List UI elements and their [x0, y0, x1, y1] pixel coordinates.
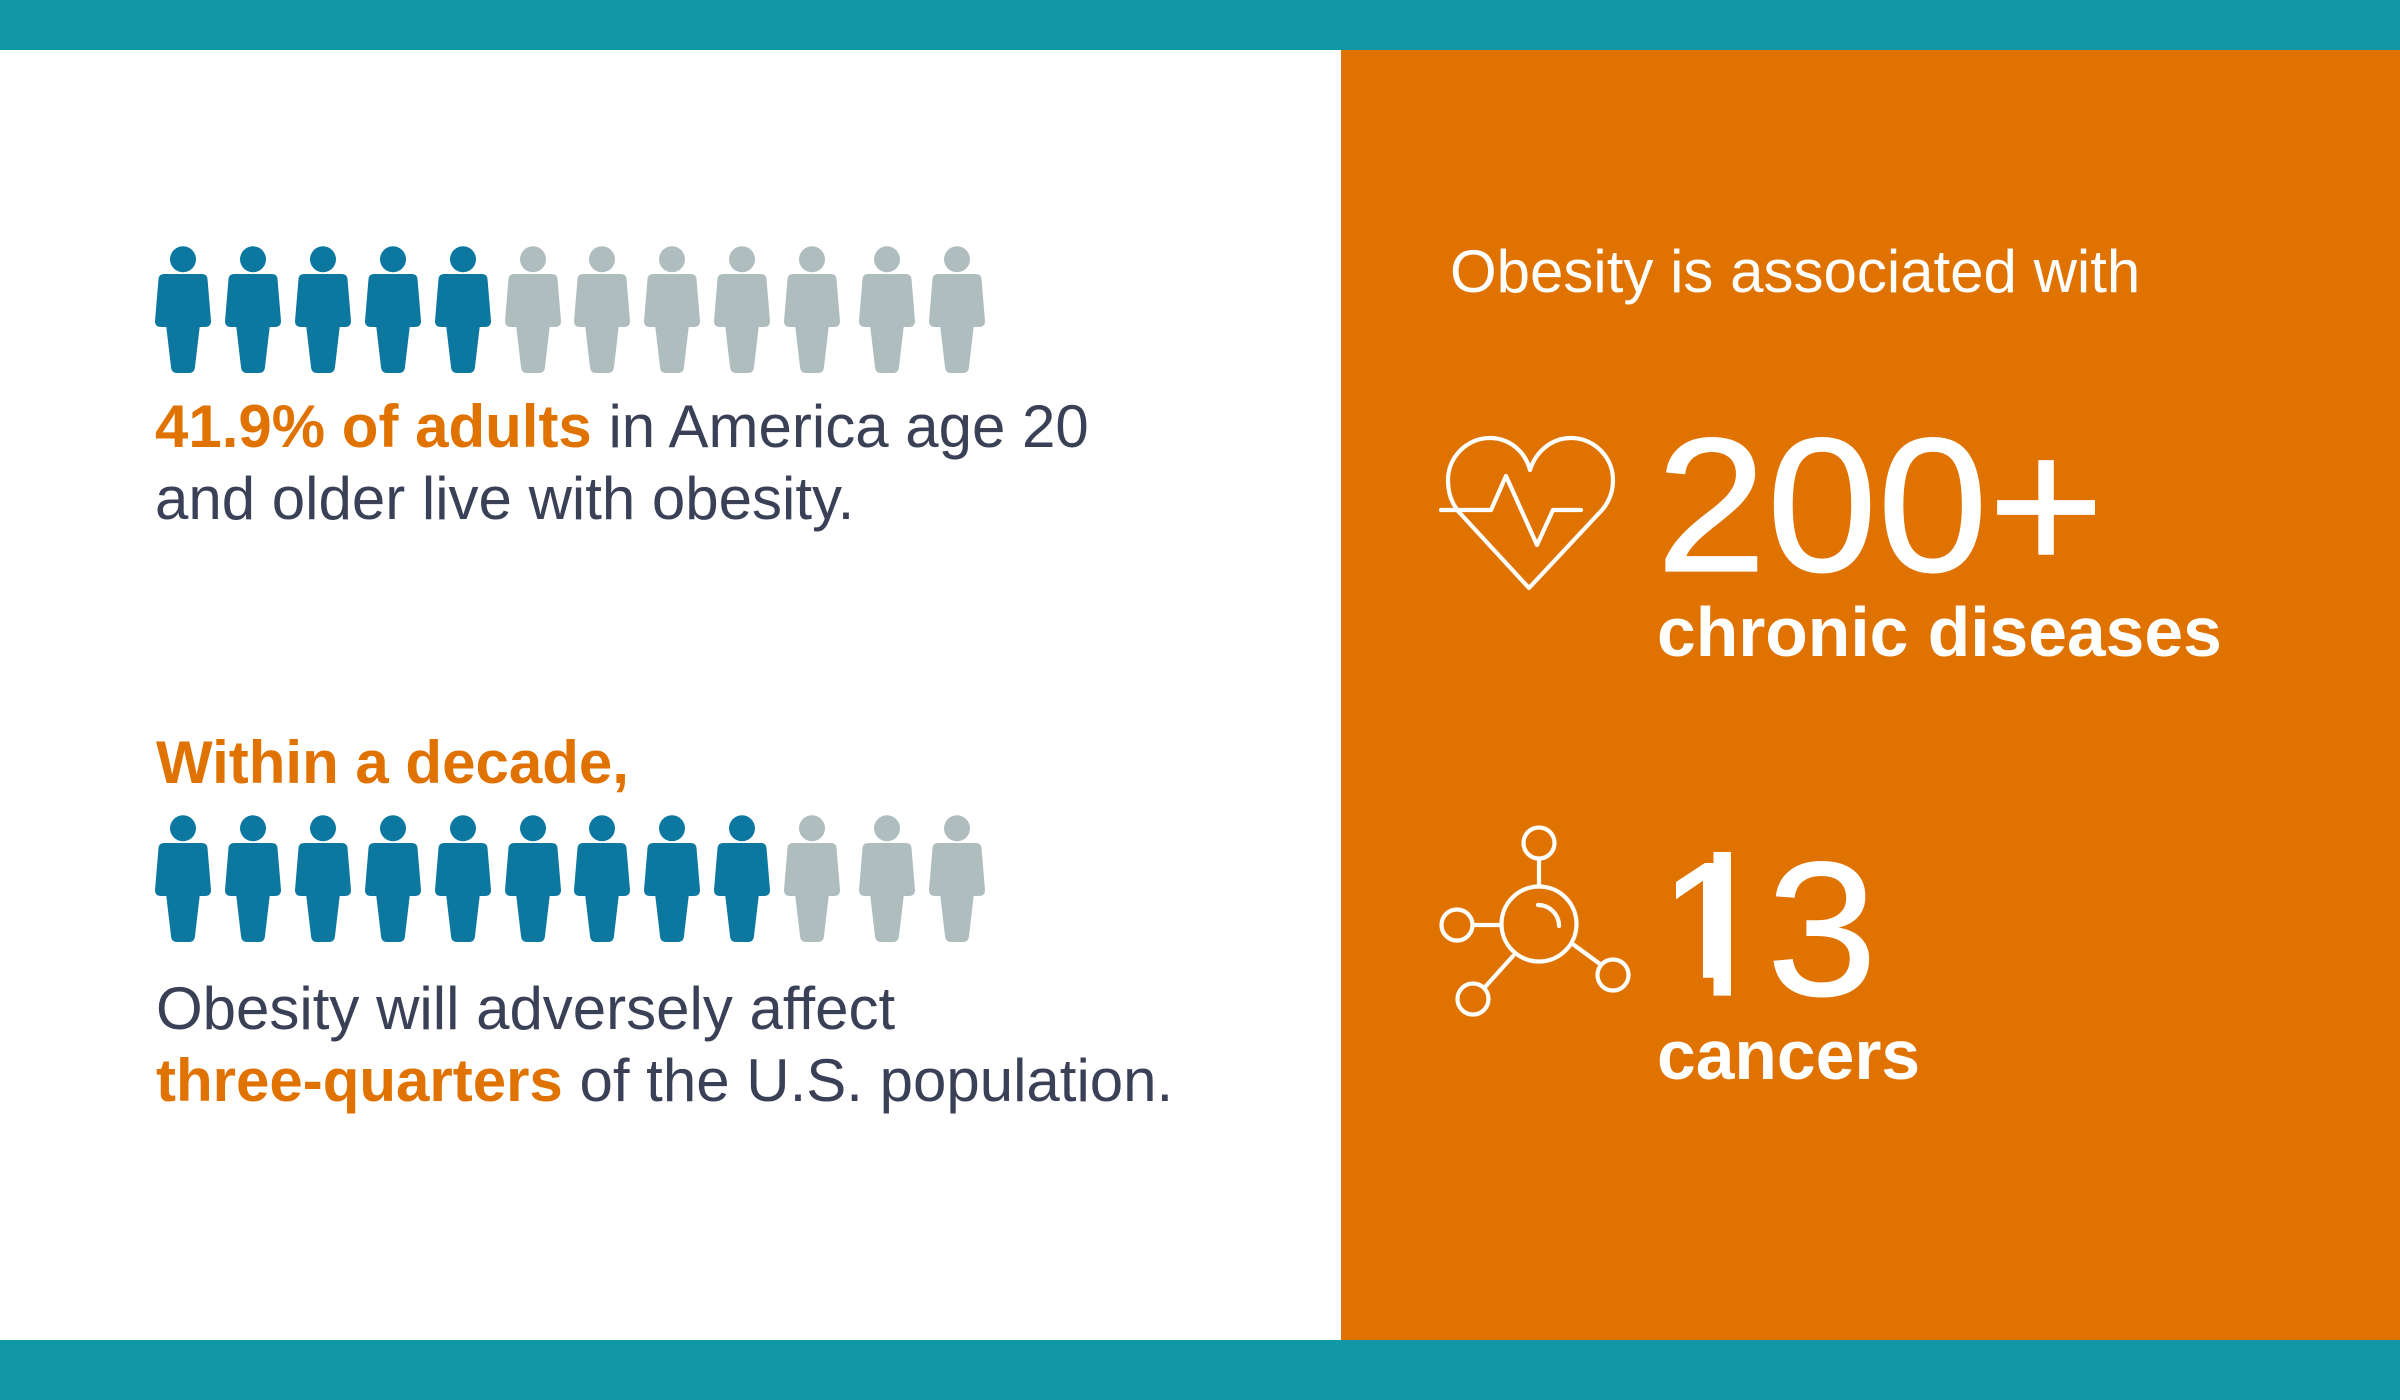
heading: obesity is associated with: Obesity is associated with	[1450, 238, 2140, 305]
text: future projection: three-quarters of the U.S. population.	[156, 1047, 1173, 1114]
stat: 200+: 200+	[1656, 399, 2104, 612]
top band	[0, 0, 2400, 50]
icon: molecule network	[1442, 828, 1628, 1014]
text: future projection	[156, 975, 1173, 1114]
text: adults statistic: 41.9% of adults in America age 20	[155, 393, 1089, 460]
stat: 13: 3	[1767, 823, 1877, 1036]
bottom band	[0, 1340, 2400, 1400]
pictogram: 5 of 12 people highlighted	[155, 246, 985, 373]
text: adults statistic: and older live with obesity.	[155, 465, 854, 532]
stat: 13: 1	[1654, 823, 1764, 1036]
pictogram: 9 of 12 people highlighted	[155, 815, 985, 942]
label: cancers: cancers	[1657, 1016, 1920, 1094]
text: adults statistic	[155, 393, 1089, 532]
stat: 13	[1676, 852, 1870, 998]
icon: heart with pulse	[1441, 438, 1613, 588]
text: future projection: Obesity will adversely affect	[156, 975, 896, 1042]
panel: associated conditions	[1341, 50, 2400, 1340]
heading: within a decade: Within a decade,	[156, 729, 629, 796]
label: chronic diseases: chronic diseases	[1657, 593, 2222, 671]
